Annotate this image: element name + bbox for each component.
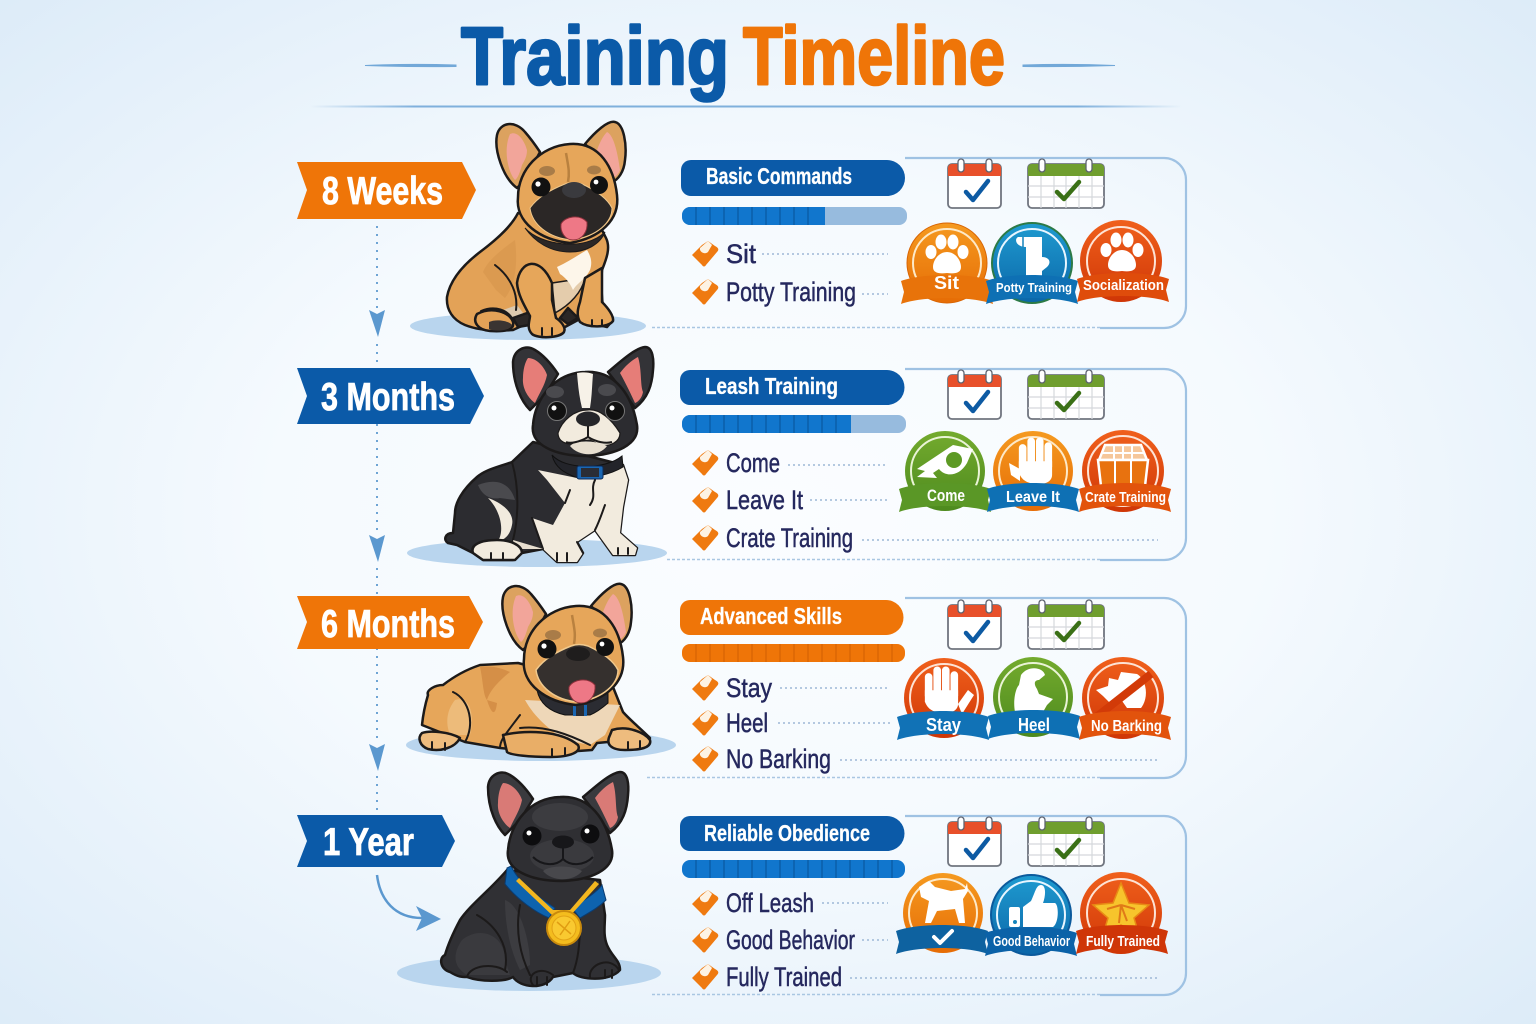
heading pill: Leash Training: Leash Training xyxy=(705,373,838,399)
calendars xyxy=(948,159,1104,208)
badge: Come xyxy=(899,431,991,512)
progress bar: full xyxy=(682,644,905,662)
badge: Sit: Sit xyxy=(934,273,959,293)
badge: No Barking: No Barking xyxy=(1091,718,1162,735)
badge: Sit xyxy=(901,223,993,304)
checklist: Potty Training xyxy=(726,277,856,307)
badge: Good Behavior: Good Behavior xyxy=(993,934,1070,950)
progress bar: partial xyxy=(682,207,907,225)
badge: Potty Training: Potty Training xyxy=(996,280,1072,295)
badge: Leave It xyxy=(987,431,1079,512)
stage label: 1 Year xyxy=(297,815,455,867)
panel: 1 year xyxy=(650,816,1186,995)
dog: tan puppy lying down xyxy=(406,584,676,761)
head: black puppy xyxy=(488,772,628,881)
badge: Stay: Stay xyxy=(926,715,961,735)
checklist: Come xyxy=(726,448,780,478)
progress bar: mostly full xyxy=(682,415,906,433)
badge: Socialization: Socialization xyxy=(1083,277,1164,294)
title: Timeline xyxy=(743,11,1005,102)
calendars xyxy=(948,370,1104,419)
checklist: Off Leash xyxy=(726,888,814,918)
checklist xyxy=(692,239,888,307)
head: black and white puppy xyxy=(513,347,653,456)
timeline connector with arrows xyxy=(369,226,441,931)
badge: Crate Training: Crate Training xyxy=(1085,489,1166,506)
badge: Crate Training xyxy=(1079,430,1171,512)
badge: Heel: Heel xyxy=(1018,715,1050,735)
checklist: Good Behavior xyxy=(726,925,855,955)
badge: Potty Training xyxy=(986,223,1078,304)
checklist xyxy=(692,888,1158,992)
stage label: 3 Months xyxy=(297,368,484,424)
panel: 6 months xyxy=(645,598,1186,778)
title xyxy=(310,11,1182,108)
badge: Come: Come xyxy=(927,486,965,505)
checklist: Sit xyxy=(726,239,756,269)
dog: black and white puppy sitting xyxy=(407,347,667,567)
badge: No Barking xyxy=(1079,657,1171,740)
badge: Good Behavior xyxy=(985,875,1077,956)
checklist: Fully Trained xyxy=(726,962,842,992)
checklist xyxy=(692,673,1160,774)
checklist: Heel xyxy=(726,708,768,738)
heading pill: Reliable Obedience xyxy=(680,816,904,851)
dog: black puppy with medal xyxy=(397,772,661,991)
head: lying puppy xyxy=(502,584,632,705)
checklist: Crate Training xyxy=(726,523,853,553)
checklist xyxy=(692,448,1158,553)
stage label: 8 Weeks xyxy=(297,162,476,219)
heading pill: Advanced Skills xyxy=(680,600,904,635)
panel: 3 months xyxy=(665,369,1186,560)
progress bar: full xyxy=(682,860,905,878)
stage label: 6 Months: 6 Months xyxy=(321,603,455,646)
stage label: 6 Months xyxy=(297,596,483,649)
head: tan puppy xyxy=(496,122,626,243)
dog: tan puppy sitting xyxy=(410,122,646,340)
badge: Fully Trained: Fully Trained xyxy=(1086,933,1160,950)
stage label: 1 Year: 1 Year xyxy=(323,821,414,864)
checklist: Stay xyxy=(726,673,772,703)
heading pill: Basic Commands: Basic Commands xyxy=(706,163,852,189)
badge: Heel xyxy=(988,657,1080,739)
heading pill: Basic Commands xyxy=(681,160,905,196)
heading pill: Reliable Obedience: Reliable Obedience xyxy=(704,820,870,846)
heading pill: Advanced Skills: Advanced Skills xyxy=(700,603,842,629)
title: Training xyxy=(461,11,729,102)
stage label: 8 Weeks: 8 Weeks xyxy=(322,170,443,213)
stage label: 3 Months: 3 Months xyxy=(321,376,455,419)
panel: 8 weeks xyxy=(650,158,1186,328)
calendars xyxy=(948,600,1104,649)
badge: dog with check xyxy=(896,873,988,954)
badge: Fully Trained xyxy=(1076,872,1168,954)
badge: Stay xyxy=(897,658,989,740)
calendars xyxy=(948,817,1104,866)
checklist: No Barking xyxy=(726,744,831,774)
badge: Socialization xyxy=(1077,220,1169,302)
heading pill: Leash Training xyxy=(680,370,904,405)
badge: Leave It: Leave It xyxy=(1006,489,1061,506)
checklist: Leave It xyxy=(726,485,803,515)
